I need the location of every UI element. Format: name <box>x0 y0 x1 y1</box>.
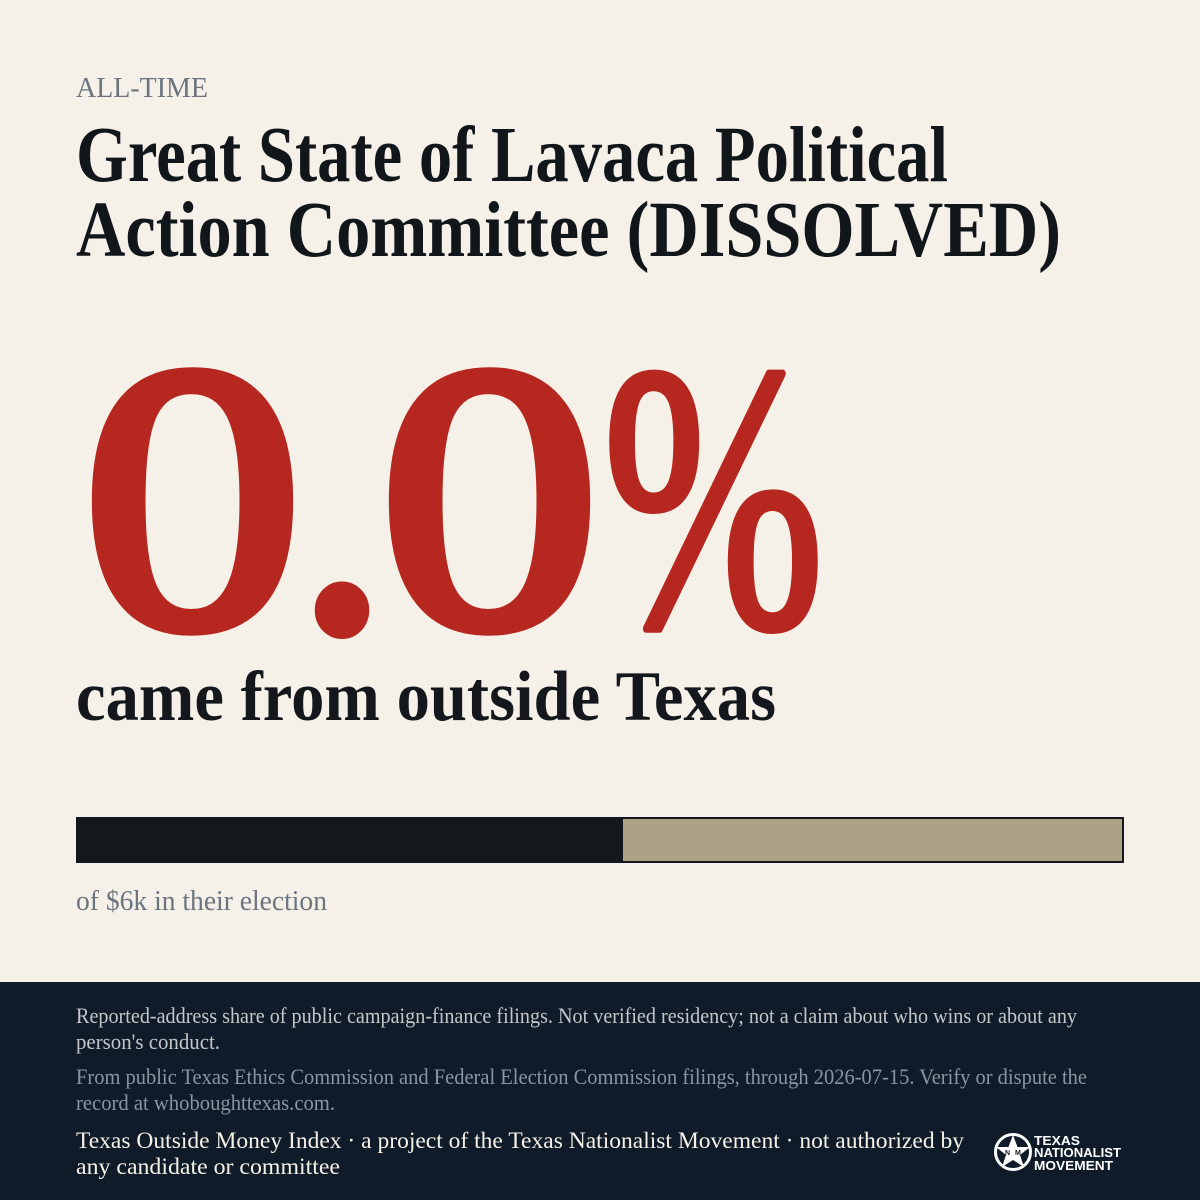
footer panel <box>0 982 1200 1200</box>
logo: Texas Nationalist Movement: M <box>1015 1150 1021 1157</box>
big number: 0.0%: 0 <box>82 288 303 709</box>
attribution text: any candidate or committee <box>76 1154 340 1179</box>
big number: 0.0%: 0 <box>379 288 600 709</box>
big number: 0.0%: % <box>603 288 824 707</box>
source text: From public Texas Ethics Commission and Federal Election Commission filings, through 2026-07-15. Verify or dispute the <box>76 1064 1087 1089</box>
attribution text: Texas Outside Money Index · a project of the Texas Nationalist Movement · not authorized by <box>76 1128 964 1153</box>
subheading: came from outside Texas <box>76 658 776 736</box>
logo: Texas Nationalist Movement: N <box>1005 1150 1010 1157</box>
attribution text <box>76 1128 964 1179</box>
source text <box>76 1064 1087 1115</box>
share bar <box>76 817 1124 863</box>
logo: Texas Nationalist Movement: NATIONALIST <box>1034 1146 1121 1160</box>
title <box>76 112 1061 274</box>
title: Great State of Lavaca Political <box>76 112 948 199</box>
bar caption: of $6k in their election <box>76 885 327 917</box>
big number: 0.0%: . <box>300 318 384 711</box>
title: Action Committee (DISSOLVED) <box>76 187 1061 274</box>
disclaimer text <box>76 1003 1077 1054</box>
source text: record at whoboughttexas.com. <box>76 1090 335 1115</box>
logo: Texas Nationalist Movement <box>996 1134 1121 1173</box>
eyebrow: ALL-TIME: ALL-TIME <box>76 73 208 104</box>
logo: Texas Nationalist Movement: TEXAS <box>1034 1134 1080 1148</box>
big number: 0.0% <box>82 288 824 711</box>
disclaimer text: person's conduct. <box>76 1029 220 1054</box>
logo: Texas Nationalist Movement: MOVEMENT <box>1034 1159 1113 1173</box>
disclaimer text: Reported-address share of public campaign-finance filings. Not verified residency; not a claim about who wins or about any <box>76 1003 1077 1028</box>
